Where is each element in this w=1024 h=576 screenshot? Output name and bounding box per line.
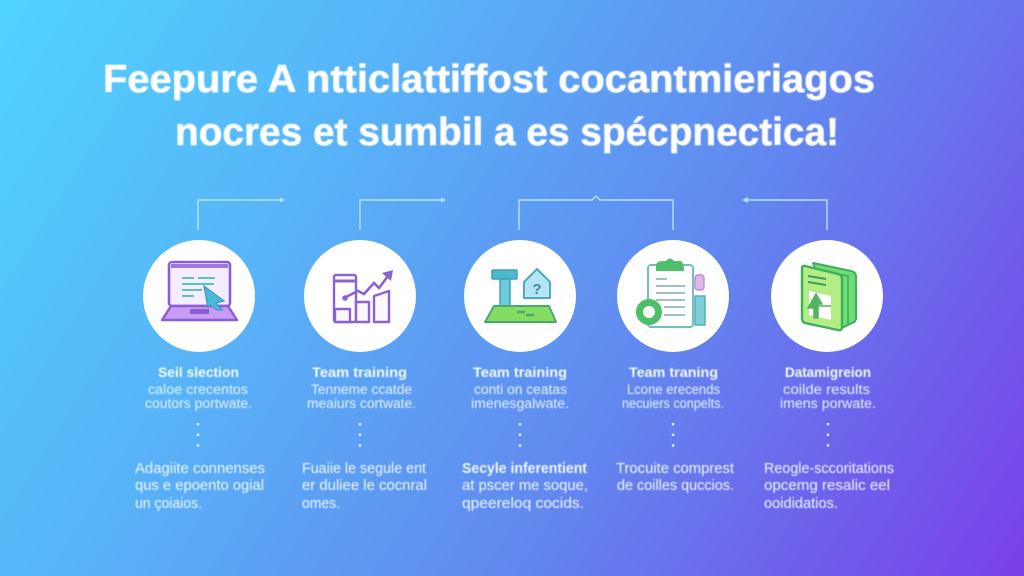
description [145,382,252,411]
heading: Seil slection [158,364,239,380]
description [307,382,416,411]
detail text: un çoiaios. [135,495,202,512]
description [622,382,724,411]
icon: stand and price tag [464,240,576,352]
description: caloe crecentos [148,382,248,397]
description: necuiers conpelts. [622,396,724,411]
detail text [616,460,735,494]
detail text: Fuaiie le segule ent [302,460,427,477]
description: coutors portwate. [145,396,252,411]
detail text [302,460,427,512]
heading: Datamigreion [785,364,871,380]
description: Tenneme ccatde [311,382,412,397]
detail text: at pscer me soque, [462,477,588,494]
dotted divider [672,423,674,447]
dotted divider [197,423,199,447]
detail text: opcemg resalic eel [764,477,890,494]
detail text: de coilles quccios. [617,477,734,494]
description: Lcone erecends [627,382,720,397]
icon: laptop [143,240,255,352]
detail text: qus e epoento ogial [135,477,264,494]
detail text: Adagiite connenses [135,460,265,477]
detail text: er duliee le cocnral [302,477,427,494]
dotted divider [359,423,361,447]
heading: Team traning [629,364,718,380]
icon: green document stack [771,240,883,352]
detail text: Trocuite comprest [616,460,735,477]
detail text: Reogle-sccoritations [764,460,894,477]
detail text [135,460,265,512]
panel: step 5 [764,240,894,512]
dotted divider [519,423,521,447]
detail text: qpeereloq cocids. [462,495,584,512]
arrow: step 1 to step 2 [198,198,285,230]
icon: stand and price tag: ? [532,281,542,298]
description: conti on ceatas [474,382,567,397]
icon: growth chart [304,240,416,352]
title [103,58,875,154]
detail text [462,460,588,512]
panel: step 2 [302,240,427,512]
detail text: ooididatios. [764,495,838,512]
detail text [764,460,894,512]
panel: step 3 [462,240,588,512]
panel: step 4 [616,240,735,494]
arrow: step 2 to step 3 [360,198,446,230]
heading: Team training [473,364,567,380]
detail text: omes. [302,495,340,512]
panel: step 1 [135,240,265,512]
title: nocres et sumbil a es spécpnectica! [175,111,839,154]
arrow: step 5 back to step 4 [742,197,827,230]
description [471,382,569,411]
detail text: Secyle inferentient [462,460,587,477]
title: Feepure A ntticlattiffost cocantmieriagos [103,58,875,101]
description: imens porwate. [780,396,876,411]
bracket: step 3 to step 4 [519,196,673,230]
connector arrows [198,196,827,230]
description: meaiurs cortwate. [307,396,416,411]
dotted divider [827,423,829,447]
description: imenesgalwate. [471,396,569,411]
description [780,382,876,411]
icon: clipboard [617,240,729,352]
description: coilde results [783,382,870,397]
heading: Team training [312,364,407,380]
